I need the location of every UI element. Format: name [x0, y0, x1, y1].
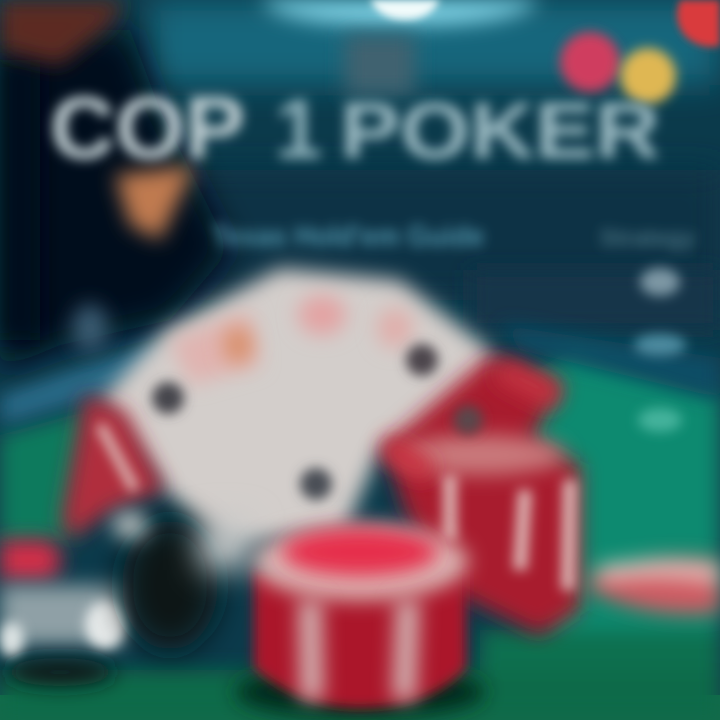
subtitle: Texas Hold'em Guide — [212, 220, 484, 253]
logo circles — [560, 0, 720, 104]
card pips — [152, 344, 438, 500]
title — [50, 78, 660, 177]
table edge — [0, 325, 720, 425]
playing cards fan — [100, 268, 500, 545]
single chip right — [590, 557, 720, 614]
player figure — [0, 0, 230, 370]
side labels — [634, 268, 686, 432]
icon: hand — [115, 165, 195, 240]
title: 1 — [275, 82, 322, 176]
title: COP — [50, 78, 245, 177]
title: POKER — [340, 86, 660, 175]
red chip stack right — [384, 355, 580, 635]
red chips left — [0, 395, 250, 686]
subtitle: Strategy — [600, 225, 696, 252]
green table — [0, 350, 720, 720]
red chip stack front — [235, 524, 485, 718]
subtitle — [212, 220, 696, 253]
